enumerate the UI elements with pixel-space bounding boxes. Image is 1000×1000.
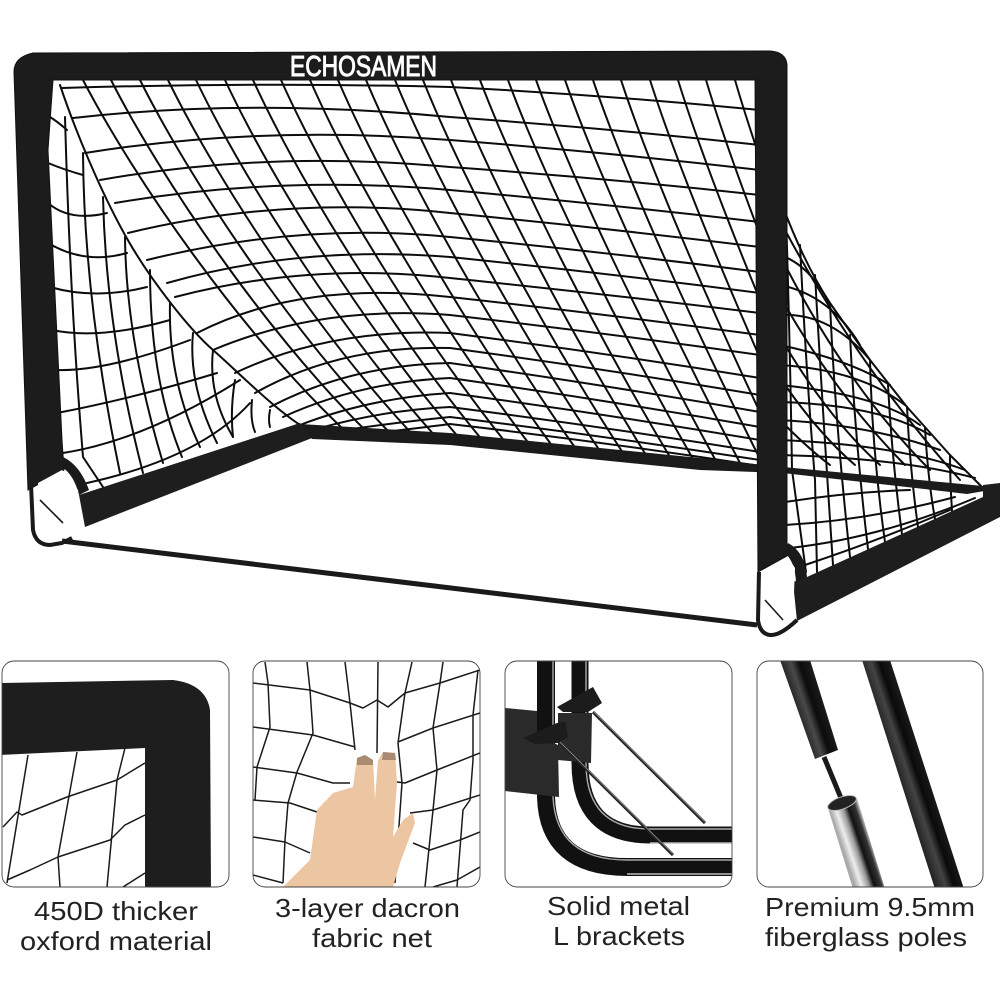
caption: Solid metal — [547, 891, 690, 921]
caption: L brackets — [553, 921, 685, 951]
detail photo: frame corner — [0, 680, 211, 890]
caption: oxford material — [20, 926, 212, 956]
right corner bracket — [758, 543, 807, 635]
caption: 3-layer dacron — [275, 893, 460, 923]
panel: dacron net — [253, 661, 480, 953]
panel: metal brackets — [505, 661, 735, 951]
right ground beam — [793, 483, 1000, 621]
left side net panel — [48, 117, 270, 487]
panel: oxford material — [0, 661, 229, 956]
caption — [547, 891, 690, 951]
brand name: ECHOSAMEN — [290, 51, 437, 83]
detail photo: poles — [780, 660, 964, 889]
goal frame — [14, 51, 787, 572]
back net main panel — [59, 80, 757, 464]
right side net panel — [780, 207, 985, 572]
panel: fiberglass poles — [757, 660, 983, 952]
caption: fiberglass poles — [765, 922, 967, 952]
soccer goal — [14, 51, 1000, 635]
caption: Premium 9.5mm — [765, 892, 975, 922]
detail photo: hand pulling net — [253, 662, 480, 887]
front ground rod — [62, 541, 757, 625]
back ground bar — [300, 424, 990, 494]
caption — [20, 896, 212, 956]
caption: 450D thicker — [34, 896, 198, 926]
caption — [765, 892, 975, 952]
left ground beam — [79, 423, 312, 527]
detail photo: L brackets — [505, 661, 735, 874]
caption — [275, 893, 460, 953]
left corner bracket — [31, 457, 89, 545]
caption: fabric net — [312, 923, 433, 953]
